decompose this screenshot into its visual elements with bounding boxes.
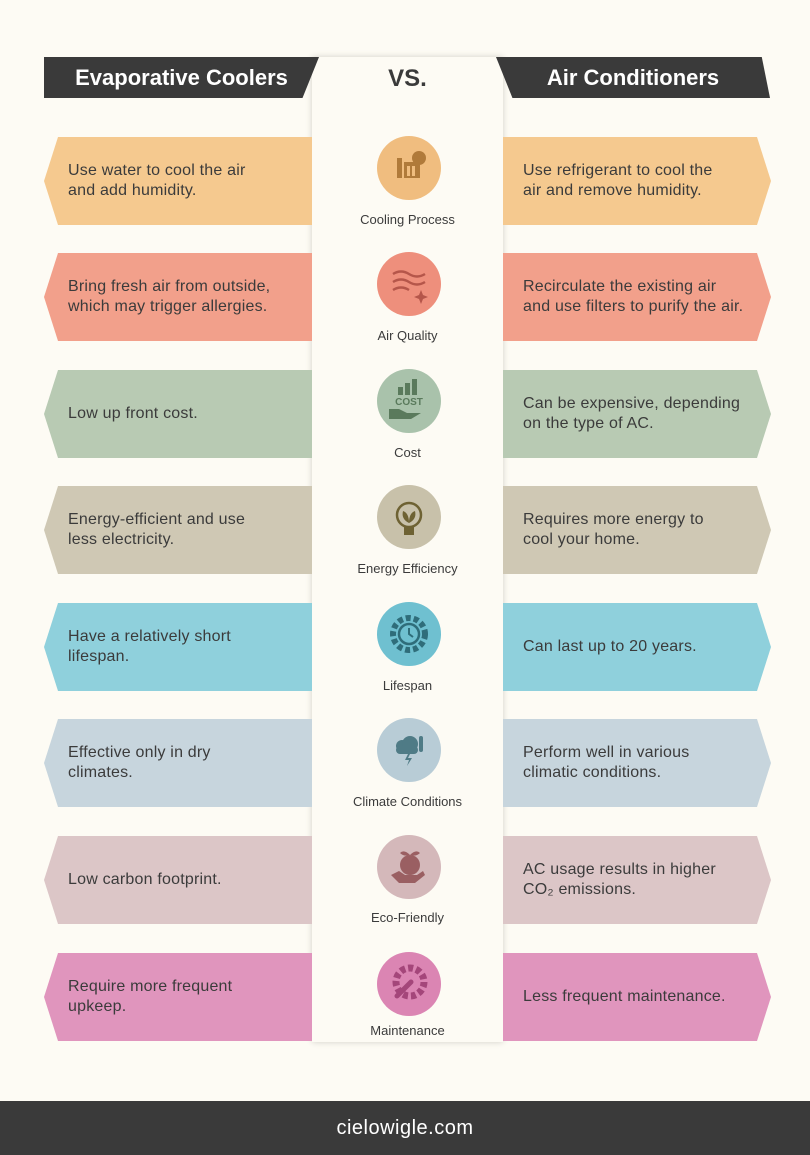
header left: Evaporative Coolers: Evaporative Coolers xyxy=(75,65,288,90)
row 3 left xyxy=(44,370,312,458)
row 2 right: and use filters to purify the air. xyxy=(523,298,743,315)
footer xyxy=(0,1101,810,1155)
row 1 left: and add humidity. xyxy=(68,182,197,199)
center column xyxy=(312,57,503,1042)
row 3 left: Low up front cost. xyxy=(68,405,198,422)
row 1 right: Use refrigerant to cool the xyxy=(523,162,712,179)
row 3 right xyxy=(503,370,771,458)
row 4 right: Requires more energy to xyxy=(523,511,704,528)
label: Eco-Friendly: Eco-Friendly xyxy=(371,910,444,925)
row 7 left: Low carbon footprint. xyxy=(68,871,222,888)
row 6 left: Effective only in dry xyxy=(68,744,211,761)
row 6 left: climates. xyxy=(68,764,133,781)
label: Cooling Process: Cooling Process xyxy=(360,212,455,227)
icon: cost xyxy=(377,369,441,433)
row 4 left: less electricity. xyxy=(68,531,174,548)
row 7 left xyxy=(44,836,312,924)
row 1 right xyxy=(503,137,771,225)
footer: cielowigle.com xyxy=(336,1117,474,1139)
row 8 left: Require more frequent xyxy=(68,978,232,995)
row 7 right: CO₂ emissions. xyxy=(523,881,636,898)
label: Maintenance: Maintenance xyxy=(370,1023,445,1038)
icon: maintenance xyxy=(377,952,441,1016)
row 5 left: Have a relatively short xyxy=(68,628,231,645)
row 6 right xyxy=(503,719,771,807)
row 4 left xyxy=(44,486,312,574)
label: Energy Efficiency: Energy Efficiency xyxy=(357,561,458,576)
row 4 right: cool your home. xyxy=(523,531,640,548)
row 2 left: Bring fresh air from outside, xyxy=(68,278,270,295)
row 8 left xyxy=(44,953,312,1041)
header left: Evaporative Coolers xyxy=(44,57,319,98)
row 2 right: Recirculate the existing air xyxy=(523,278,716,295)
label: Air Quality: Air Quality xyxy=(378,328,437,343)
icon: cost: COST xyxy=(395,397,423,408)
row 6 right: Perform well in various xyxy=(523,744,689,761)
row 5 right xyxy=(503,603,771,691)
row 8 left: upkeep. xyxy=(68,998,126,1015)
icon: energy efficiency xyxy=(377,485,441,549)
row 8 right: Less frequent maintenance. xyxy=(523,988,726,1005)
header right: Air Conditioners xyxy=(496,57,770,98)
row 4 left: Energy-efficient and use xyxy=(68,511,245,528)
row 3 right: on the type of AC. xyxy=(523,415,654,432)
icon: cooling process xyxy=(377,136,441,200)
row 6 left xyxy=(44,719,312,807)
row 7 right: AC usage results in higher xyxy=(523,861,716,878)
row 7 right xyxy=(503,836,771,924)
row 1 right: air and remove humidity. xyxy=(523,182,702,199)
row 2 right xyxy=(503,253,771,341)
row 8 right xyxy=(503,953,771,1041)
row 2 left xyxy=(44,253,312,341)
label: Climate Conditions: Climate Conditions xyxy=(353,794,462,809)
icon: climate conditions xyxy=(377,718,441,782)
row 3 right: Can be expensive, depending xyxy=(523,395,740,412)
label: Cost: Cost xyxy=(394,445,421,460)
row 5 right: Can last up to 20 years. xyxy=(523,638,697,655)
row 6 right: climatic conditions. xyxy=(523,764,661,781)
row 2 left: which may trigger allergies. xyxy=(68,298,267,315)
row 1 left xyxy=(44,137,312,225)
header right: Air Conditioners: Air Conditioners xyxy=(547,65,719,90)
icon: air quality xyxy=(377,252,441,316)
row 4 right xyxy=(503,486,771,574)
icon: eco-friendly xyxy=(377,835,441,899)
row 5 left xyxy=(44,603,312,691)
label: Lifespan: Lifespan xyxy=(383,678,432,693)
header center: vs.: VS. xyxy=(388,65,427,92)
row 1 left: Use water to cool the air xyxy=(68,162,246,179)
icon: lifespan xyxy=(377,602,441,666)
row 5 left: lifespan. xyxy=(68,648,129,665)
